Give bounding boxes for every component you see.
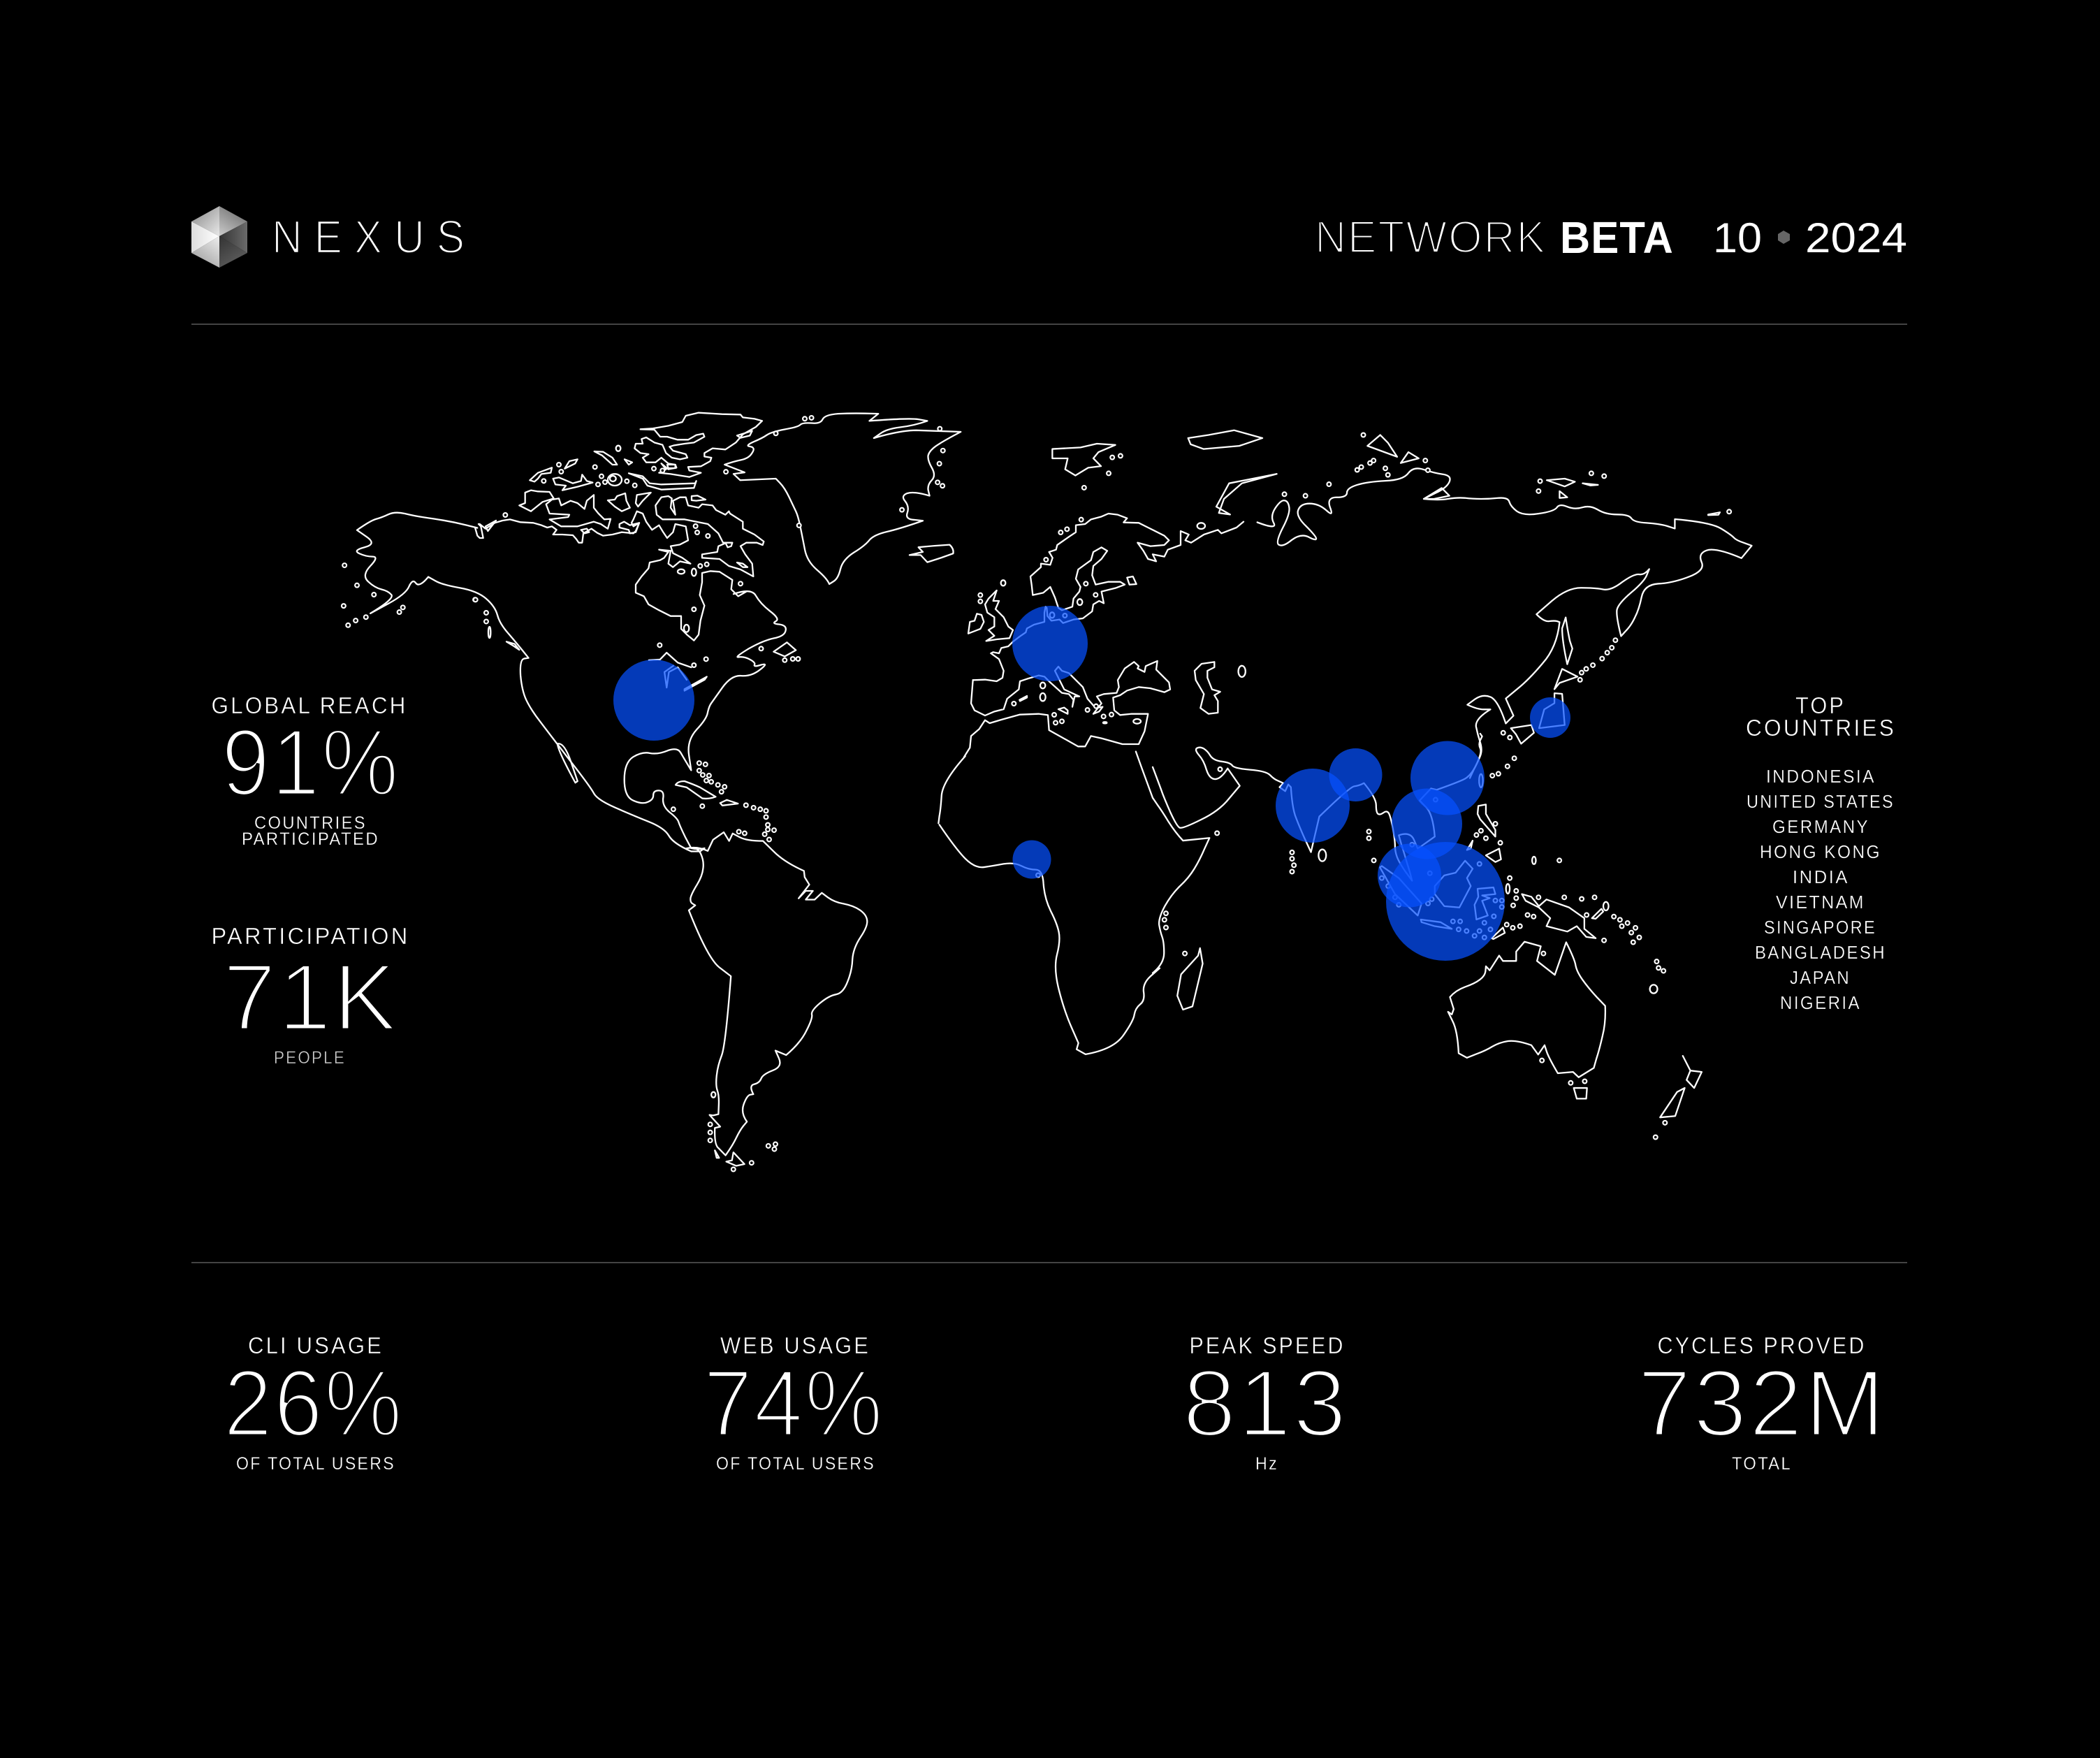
stat: web usage: 74%: [703, 1350, 884, 1456]
list: top countries: INDONESIA: [1766, 767, 1876, 787]
stat: peak speed: Hz: [1255, 1454, 1278, 1474]
bubble: Japan: [1530, 697, 1570, 738]
map: Northern Asia, Red Sea and Japan: [1052, 430, 1751, 798]
stat: global reach: PARTICIPATED: [242, 829, 379, 849]
bubble: India: [1276, 769, 1350, 843]
stat: participation: PEOPLE: [274, 1048, 346, 1068]
brand name: NEXUS: [272, 211, 476, 263]
report date: 10: [1713, 215, 1762, 261]
list: top countries: [1746, 692, 1896, 1013]
stat: participation: 71K: [223, 944, 399, 1050]
map: South Asia, Indonesia, Australia and East Africa: [1153, 734, 1702, 1137]
list: top countries: COUNTRIES: [1746, 715, 1896, 741]
stat: cycles proved: TOTAL: [1732, 1454, 1792, 1474]
list: top countries: INDIA: [1793, 868, 1849, 887]
stat: global reach: 91%: [221, 709, 400, 815]
bubble: United States: [613, 660, 694, 741]
list: top countries: HONG KONG: [1760, 843, 1881, 862]
list: top countries: VIETNAM: [1776, 893, 1865, 913]
list: top countries: UNITED STATES: [1747, 792, 1895, 812]
list: top countries: JAPAN: [1790, 968, 1851, 988]
bubble: Germany: [1012, 606, 1088, 681]
stat: peak speed: PEAK SPEED: [1189, 1332, 1346, 1358]
stat: global reach: GLOBAL REACH: [211, 692, 408, 718]
world map: [344, 413, 1751, 1170]
report title: NETWORK: [1315, 211, 1547, 263]
stat: web usage: OF TOTAL USERS: [716, 1454, 875, 1474]
icon: nexus cube logo: [191, 206, 247, 268]
report date: 2024: [1805, 215, 1907, 261]
report title: [1315, 211, 1674, 263]
stat: cycles proved: 732M: [1638, 1350, 1887, 1456]
list: top countries: TOP: [1795, 692, 1846, 718]
report date: [1713, 215, 1907, 261]
list: top countries: SINGAPORE: [1764, 918, 1876, 938]
list: top countries: BANGLADESH: [1755, 943, 1886, 963]
stat: CLI usage: 26%: [224, 1350, 404, 1456]
stat: participation: [211, 923, 409, 1068]
report title: BETA: [1560, 212, 1674, 263]
bubble: Bangladesh: [1329, 748, 1382, 801]
bubble: Indonesia: [1386, 842, 1505, 961]
map: Europe, Mediterranean and North Africa: [964, 514, 1244, 757]
stat: CLI usage: OF TOTAL USERS: [236, 1454, 395, 1474]
stat: participation: PARTICIPATION: [211, 923, 409, 949]
map: Canadian Arctic and Hudson Bay: [475, 413, 764, 665]
stat: global reach: COUNTRIES: [254, 813, 367, 833]
list: top countries: NIGERIA: [1780, 994, 1861, 1013]
stat: web usage: WEB USAGE: [720, 1332, 870, 1358]
stat: peak speed: 813: [1183, 1350, 1348, 1456]
list: top countries: GERMANY: [1772, 818, 1869, 837]
bubble: Vietnam: [1392, 788, 1462, 859]
bubble: Hong Kong: [1410, 741, 1485, 815]
bubble: Nigeria: [1013, 840, 1051, 879]
stat: cycles proved: CYCLES PROVED: [1657, 1332, 1867, 1358]
bubbles: participation by country: [613, 606, 1570, 961]
stat: global reach: [211, 692, 408, 849]
header: [191, 206, 1907, 268]
bubble: Singapore: [1378, 844, 1441, 907]
stat: CLI usage: CLI USAGE: [248, 1332, 384, 1358]
map: North America coasts, Greenland and Caribbean: [344, 414, 965, 851]
map: South America and Southern Africa: [686, 824, 1160, 1170]
